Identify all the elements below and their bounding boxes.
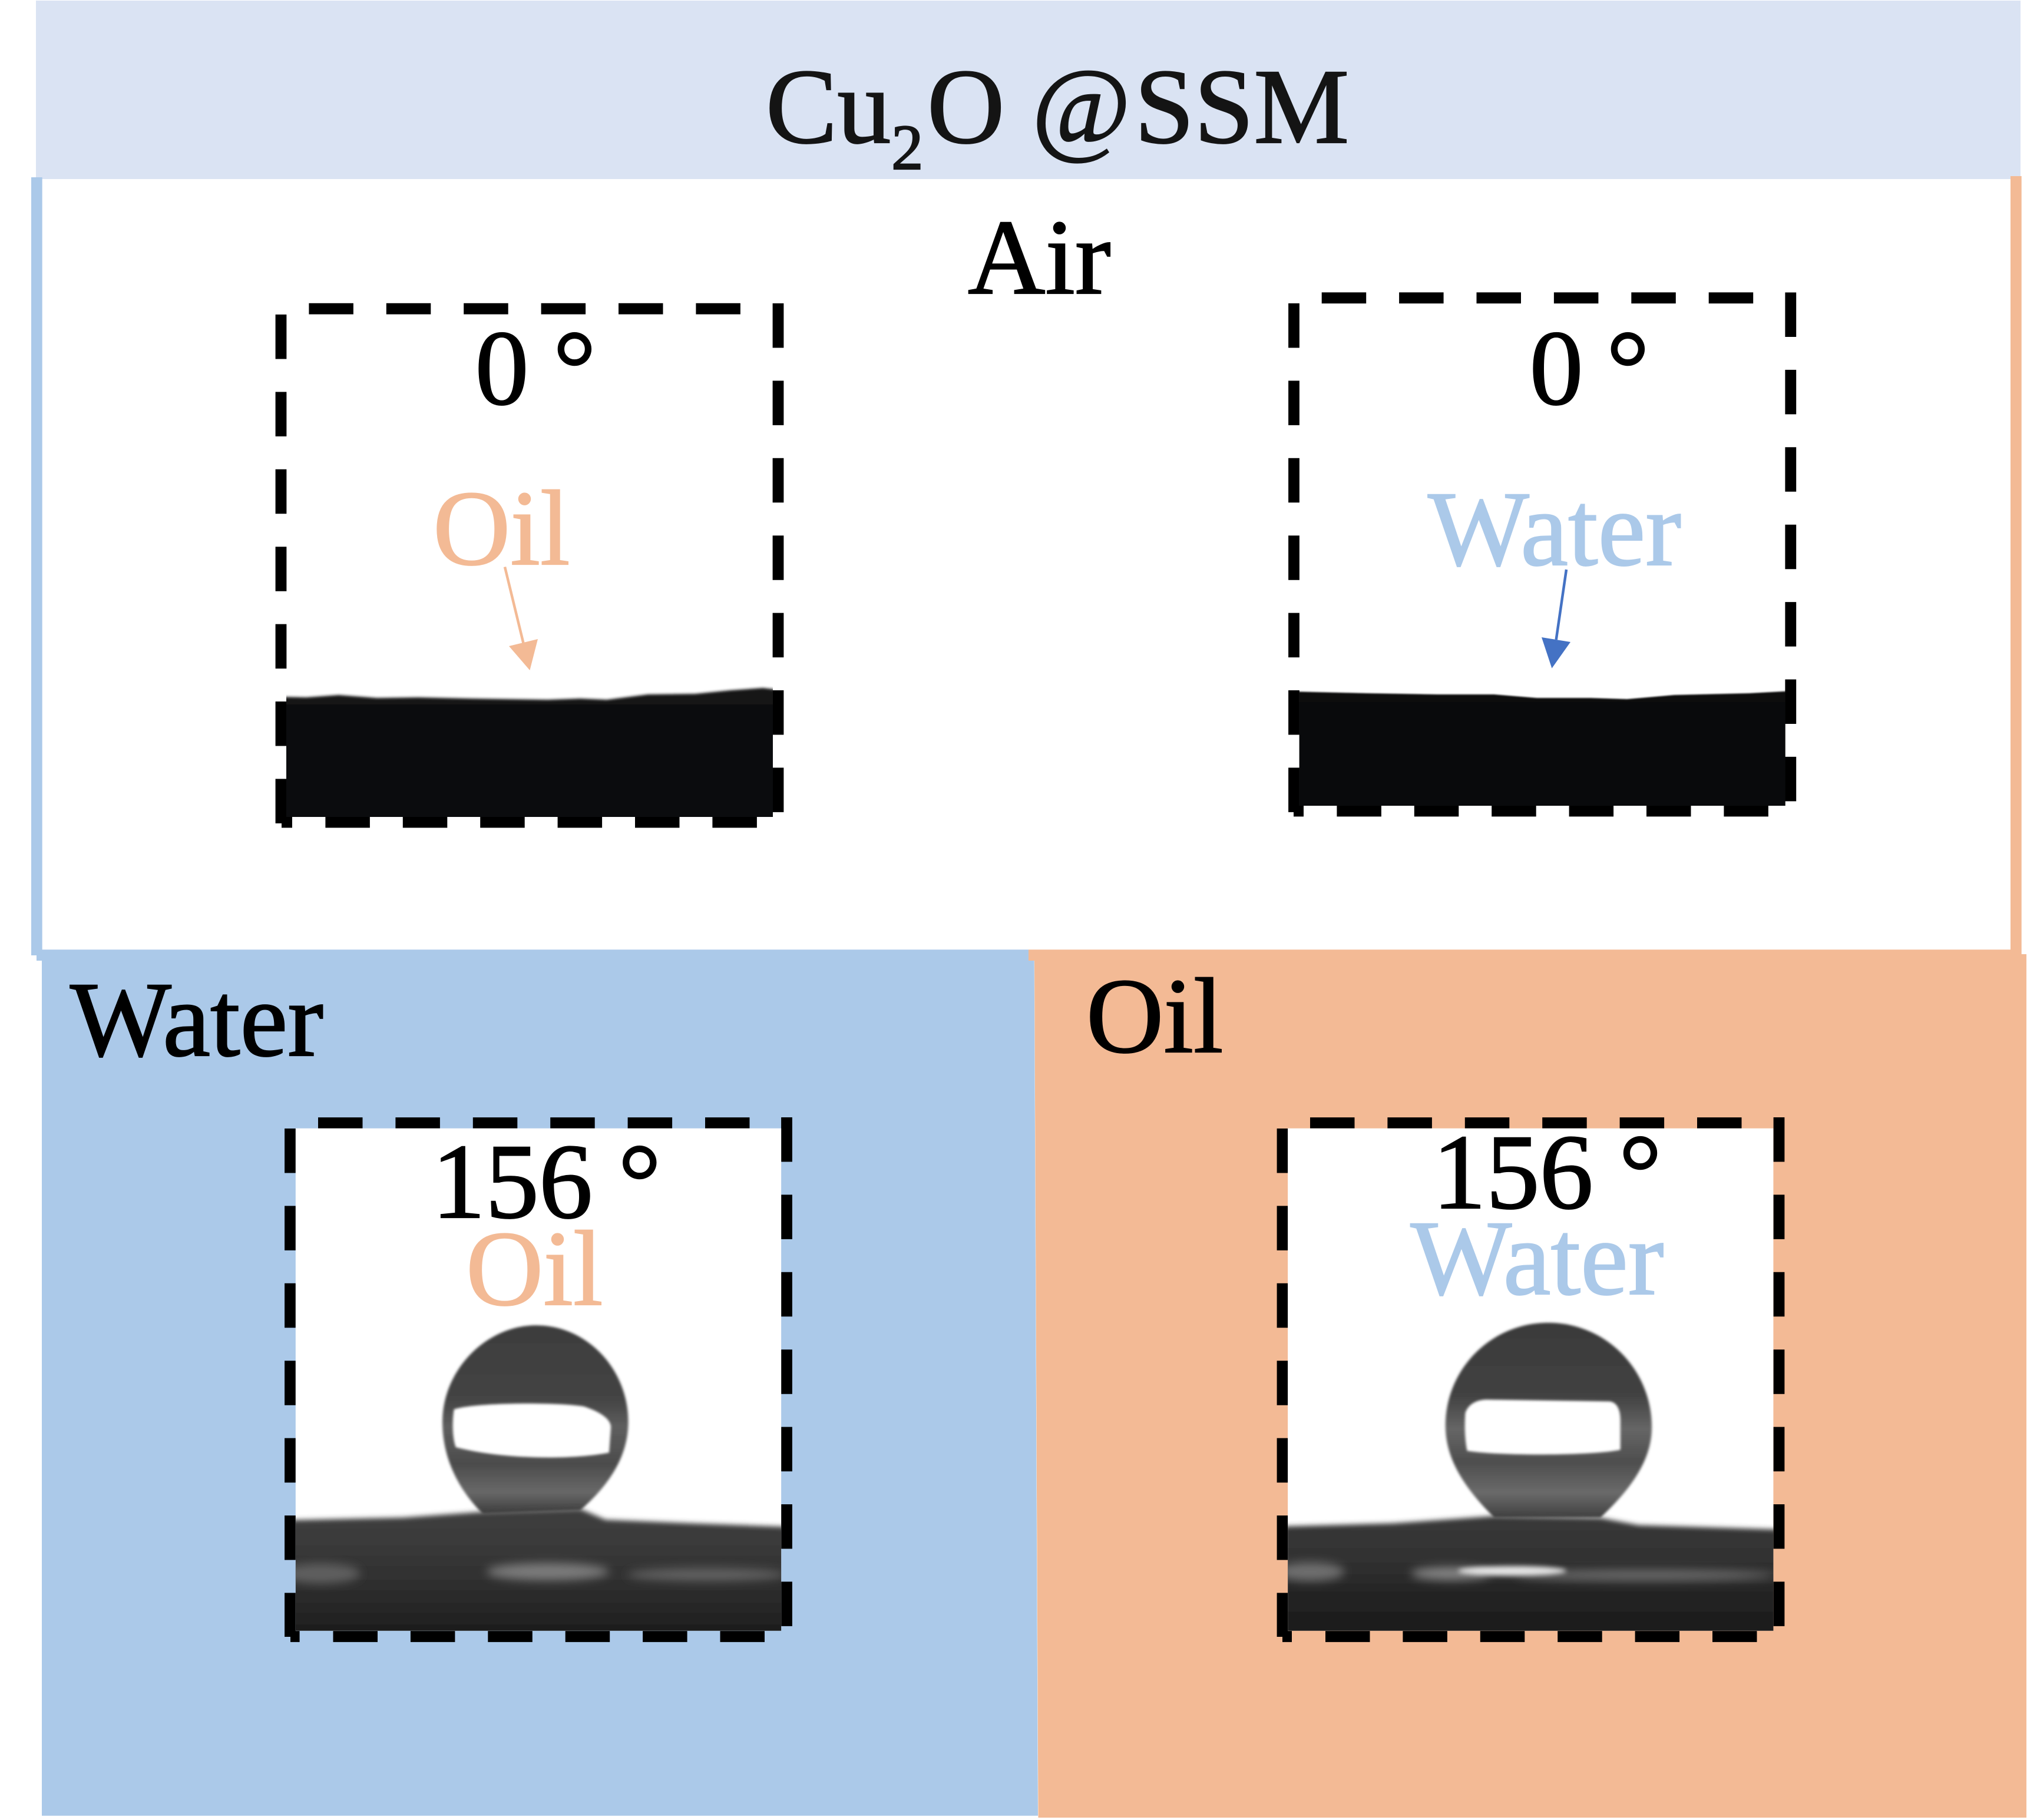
- label: Oil: Oil: [433, 469, 570, 588]
- title: SSM: [1135, 48, 1349, 166]
- photo: water droplet on mesh: [1288, 1129, 1773, 1631]
- mesh surface: [296, 1507, 781, 1631]
- panel: title banner: [36, 1, 2021, 183]
- panel: water environment background: [37, 949, 1038, 1816]
- dashed frame: [1282, 1117, 1779, 1637]
- title: O: [927, 48, 1031, 166]
- label: Water: Water: [1428, 470, 1681, 588]
- droplet highlight: [453, 1404, 611, 1458]
- dashed frame: [290, 1117, 787, 1637]
- arrow: water to surface: [1542, 570, 1570, 669]
- contact angle value: 0 °: [1530, 309, 1649, 428]
- photo: mesh surface under oil: [277, 688, 783, 825]
- panel: air side border (oil side): [2011, 176, 2022, 954]
- contact angle value: 0 °: [475, 309, 596, 428]
- panel: oil environment background: [1029, 949, 2026, 1818]
- title: Cu: [766, 48, 891, 166]
- panel: air side border (water side): [31, 177, 42, 955]
- contact angle value: 156 °: [1433, 1113, 1662, 1232]
- dashed frame: [1294, 292, 1791, 813]
- heading: Air: Air: [968, 198, 1111, 317]
- dashed frame: [281, 303, 778, 825]
- arrow: oil to surface: [505, 567, 538, 670]
- panel: water under oil, contact angle 156 degrees: [1263, 1113, 1790, 1651]
- droplet: [1446, 1323, 1652, 1518]
- title: @: [1032, 48, 1131, 166]
- droplet highlight: [1465, 1399, 1621, 1454]
- title: 2: [891, 112, 924, 183]
- heading: Oil: Oil: [1086, 957, 1224, 1076]
- photo: oil droplet on mesh: [296, 1129, 781, 1631]
- droplet: [442, 1325, 628, 1514]
- contact angle value: 156 °: [432, 1123, 661, 1241]
- label: Oil: Oil: [466, 1210, 603, 1328]
- photo: mesh surface under water: [1299, 690, 1785, 806]
- panel: oil in air, contact angle 0 degrees: [277, 303, 783, 825]
- panel: oil under water, contact angle 156 degrees: [273, 1117, 801, 1651]
- mesh surface: [1288, 1513, 1773, 1631]
- label: Water: Water: [1410, 1199, 1664, 1318]
- heading: Water: Water: [70, 961, 323, 1079]
- panel: water in air, contact angle 0 degrees: [1290, 292, 1794, 819]
